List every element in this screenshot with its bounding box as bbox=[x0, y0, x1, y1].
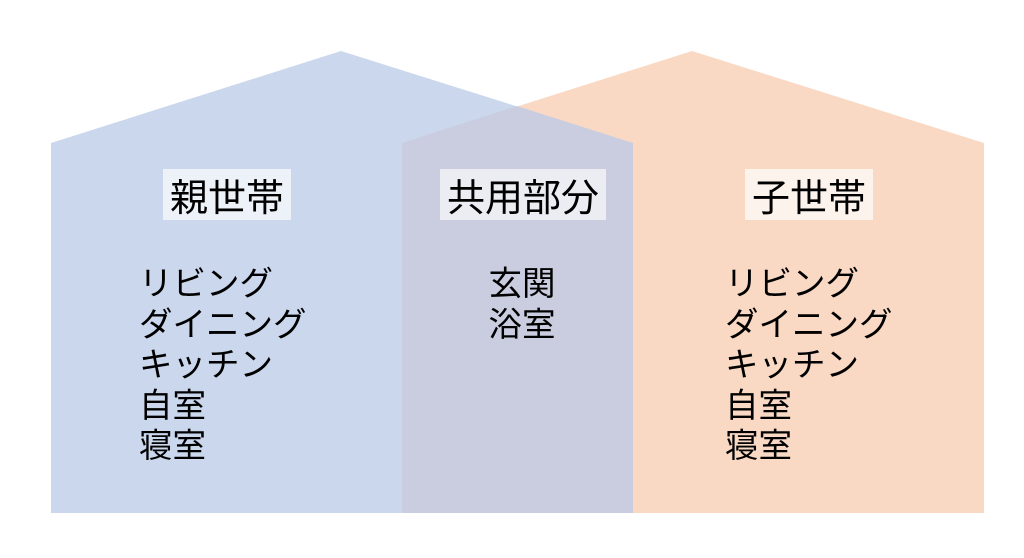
list: parent household rooms: キッチン bbox=[139, 347, 273, 384]
list: parent household rooms: リビング bbox=[139, 266, 273, 303]
list: child household rooms: 自室 bbox=[725, 388, 792, 424]
list: parent household rooms bbox=[139, 266, 306, 465]
list: shared rooms bbox=[488, 266, 556, 344]
heading: parent household: 親世帯 bbox=[170, 178, 284, 220]
list: parent household rooms: 自室 bbox=[139, 388, 206, 424]
heading: shared area: 共用部分 bbox=[447, 178, 599, 220]
list: shared rooms: 浴室 bbox=[488, 306, 556, 344]
list: parent household rooms: ダイニング bbox=[139, 306, 306, 344]
list: child household rooms bbox=[725, 266, 892, 465]
house: child household bbox=[402, 51, 984, 513]
list: child household rooms: キッチン bbox=[725, 347, 859, 384]
list: parent household rooms: 寝室 bbox=[139, 428, 206, 465]
list: shared rooms: 玄関 bbox=[488, 266, 556, 303]
shared overlap area bbox=[402, 106, 633, 513]
list: child household rooms: ダイニング bbox=[725, 306, 892, 344]
heading: child household: 子世帯 bbox=[752, 178, 866, 220]
list: child household rooms: 寝室 bbox=[725, 428, 792, 465]
list: child household rooms: リビング bbox=[725, 266, 859, 303]
house: parent household bbox=[51, 51, 633, 513]
